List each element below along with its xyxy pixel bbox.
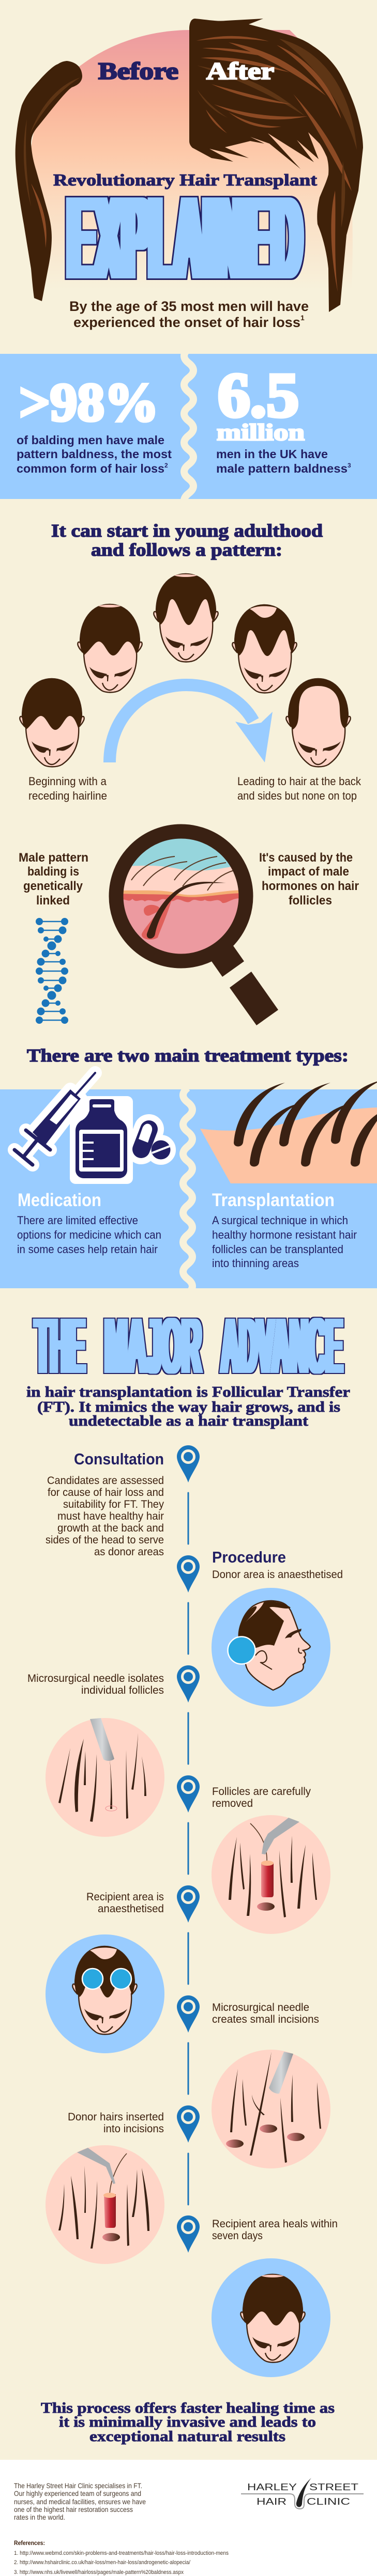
- logo: Harley Street Hair Clinic: HARLEY: [247, 2482, 297, 2492]
- step: donor hairs inserted: Donor hairs inserted: [68, 2111, 164, 2123]
- references: 2. http://www.hshairclinic.co.uk/hair-loss/men-hair-loss/androgenetic-alopecia/: [14, 2559, 191, 2566]
- icons: syringe, bottle and pills: [14, 1073, 171, 1178]
- label: before: Before: [98, 58, 178, 85]
- head stage: mild recession: [78, 604, 142, 692]
- illustration: final head with restored hair: [212, 2258, 330, 2377]
- closing statement: exceptional natural results: [89, 2428, 285, 2445]
- heading: the major advance: THE: [35, 1302, 85, 1390]
- stat: 6.5 million: million: [217, 419, 305, 445]
- step: consultation: suitability for FT. They: [63, 1498, 164, 1510]
- icon: DNA helix: [36, 918, 68, 1024]
- clinic description: Our highly experienced team of surgeons and: [14, 2489, 141, 2497]
- arrow: progression of baldness: [110, 685, 273, 762]
- text: male hormones: impact of male: [268, 865, 349, 879]
- references: References:: [14, 2539, 45, 2547]
- logo: Harley Street Hair Clinic: STREET: [309, 2482, 358, 2492]
- step: recipient area: Recipient area is: [86, 1891, 164, 1903]
- references: [14, 2539, 229, 2575]
- stat: 98 percent: of balding men have male: [17, 433, 164, 447]
- footer panel: [0, 2460, 377, 2576]
- step: consultation: Consultation: [74, 1450, 164, 1468]
- heading: pattern: [51, 521, 323, 560]
- illustration: needle creating incisions: [212, 2050, 330, 2168]
- text: genetically linked: Male pattern: [19, 851, 88, 865]
- label: after: After: [206, 58, 274, 85]
- caption: back and sides: [237, 775, 361, 802]
- head stage: beginning: [20, 679, 84, 767]
- text: male hormones: It's caused by the: [259, 851, 353, 865]
- head stage: deep recession: [154, 574, 218, 662]
- hair: before side: [16, 61, 82, 301]
- closing statement: This process offers faster healing time as: [41, 2400, 335, 2416]
- step: small incisions: Microsurgical needle: [212, 2002, 309, 2013]
- stat: 98 percent: >98%: [19, 372, 159, 432]
- heading: treatment types: There are two main treatment types:: [27, 1045, 349, 1066]
- caption: receding hairline: Beginning with a: [28, 775, 107, 788]
- clinic description: rates in the world.: [14, 2513, 65, 2521]
- clinic description: [14, 2481, 146, 2521]
- text: male hormones: [259, 851, 359, 908]
- logo: Harley Street Hair Clinic: CLINIC: [307, 2496, 350, 2507]
- text: genetically linked: balding is: [27, 865, 79, 879]
- stat: 98 percent: [17, 372, 172, 475]
- step: consultation: sides of the head to serve: [46, 1534, 164, 1546]
- step: follicles removed: Follicles are carefully: [212, 1786, 311, 1798]
- stat: 6.5 million: [216, 361, 351, 475]
- text: medication: Medication: [18, 1190, 101, 1210]
- step: follicles removed: removed: [212, 1798, 253, 1809]
- timeline: pins and connectors: [177, 1445, 200, 2253]
- step: procedure, donor area: Procedure: [212, 1548, 286, 1566]
- illustration: profile head with donor area: [212, 1588, 330, 1707]
- caption: receding hairline: receding hairline: [28, 789, 107, 802]
- intro text: 1: [300, 314, 305, 322]
- step: small incisions: creates small incisions: [212, 2013, 319, 2025]
- text: follicular transfer intro: (FT). It mimics the way hair grows, and is: [37, 1399, 340, 1415]
- step: recipient area heals: seven days: [212, 2230, 263, 2242]
- step: follicles removed: [212, 1786, 311, 1809]
- step: consultation: Candidates are assessed: [47, 1475, 164, 1487]
- step: needle isolates: individual follicles: [81, 1684, 164, 1696]
- step: consultation: must have healthy hair: [57, 1510, 164, 1522]
- closing statement: [41, 2400, 335, 2445]
- icon: magnifying glass over skin cross-section: [116, 832, 278, 1025]
- heading: pattern: and follows a pattern:: [91, 540, 282, 560]
- text: transplantation: healthy hormone resistant hair: [212, 1228, 357, 1241]
- illustration: needle isolating follicle: [46, 1718, 164, 1837]
- text: transplantation: into thinning areas: [212, 1257, 299, 1270]
- illustration: follicle removed with tweezers: [212, 1815, 330, 1934]
- hair: after side: [189, 19, 363, 312]
- references: 1. http://www.webmd.com/skin-problems-and-treatments/hair-loss/hair-loss-introduction-mens: [14, 2550, 229, 2556]
- heading: the major advance: [35, 1302, 342, 1390]
- text: medication: There are limited effective: [17, 1214, 138, 1227]
- title: Revolutionary Hair Transplant: [53, 170, 317, 189]
- text: genetically linked: [19, 851, 88, 908]
- head stage: crown thinning: [232, 605, 297, 693]
- caption: receding hairline: [28, 775, 107, 802]
- stat: 98 percent: 2: [164, 462, 168, 469]
- stat: 6.5 million: men in the UK have: [216, 447, 328, 461]
- caption: back and sides: Leading to hair at the back: [237, 775, 361, 788]
- text: genetically linked: genetically: [23, 879, 83, 893]
- references: 3. http://www.nhs.uk/livewell/hairloss/pages/male-pattern%20baldness.aspx: [14, 2569, 184, 2575]
- stat: 6.5 million: 3: [348, 462, 351, 469]
- text: transplantation: Transplantation: [212, 1190, 335, 1210]
- step: procedure, donor area: [212, 1548, 343, 1581]
- stat: 98 percent: common form of hair loss: [17, 462, 164, 475]
- logo: Harley Street Hair Clinic: HAIR: [257, 2496, 286, 2507]
- text: medication: options for medicine which can: [17, 1228, 161, 1241]
- header: split head illustration: [16, 19, 363, 312]
- logo: Harley Street Hair Clinic: [241, 2478, 364, 2509]
- heading: pattern: It can start in young adulthood: [51, 521, 323, 541]
- closing statement: it is minimally invasive and leads to: [59, 2414, 316, 2430]
- stat: 6.5 million: male pattern baldness: [216, 462, 348, 475]
- step: consultation: [46, 1450, 164, 1558]
- step: small incisions: [212, 2002, 319, 2025]
- clinic description: one of the highest hair restoration success: [14, 2505, 133, 2513]
- step: consultation: growth at the back and: [57, 1522, 164, 1534]
- text: transplantation: follicles can be transplanted: [212, 1243, 343, 1256]
- intro text: experienced the onset of hair loss: [73, 315, 300, 330]
- clinic description: The Harley Street Hair Clinic specialises in FT.: [14, 2481, 142, 2490]
- step: recipient area heals: [212, 2218, 338, 2242]
- caption: back and sides: and sides but none on top: [237, 789, 357, 802]
- text: transplantation: [212, 1190, 357, 1270]
- panel: treatment types: [0, 1073, 377, 1293]
- step: recipient area heals: Recipient area heals within: [212, 2218, 338, 2230]
- text: male hormones: hormones on hair: [262, 879, 359, 893]
- step: recipient area: [86, 1891, 164, 1915]
- text: medication: in some cases help retain hair: [17, 1243, 158, 1256]
- stat: 98 percent: pattern baldness, the most: [17, 447, 172, 461]
- clinic description: nurses, and medical facilities, ensures we have: [14, 2497, 146, 2506]
- step: procedure, donor area: Donor area is anaesthetised: [212, 1569, 343, 1581]
- step: recipient area: anaesthetised: [98, 1903, 164, 1915]
- text: follicular transfer intro: undetectable as a hair transplant: [69, 1413, 308, 1429]
- illustration: donor hair inserted with tweezers: [46, 2145, 164, 2264]
- intro text: [69, 299, 309, 330]
- step: consultation: as donor areas: [94, 1546, 164, 1558]
- illustration: hair growing from scalp: [200, 1080, 377, 1183]
- stat: 6.5 million: 6.5: [218, 361, 299, 430]
- panel: statistics: [0, 349, 377, 508]
- text: follicular transfer intro: in hair transplantation is Follicular Transfer: [26, 1384, 350, 1400]
- step: needle isolates: Microsurgical needle isolates: [27, 1673, 164, 1684]
- text: genetically linked: linked: [36, 894, 70, 908]
- text: follicular transfer intro: [26, 1384, 350, 1429]
- text: medication: [17, 1190, 161, 1256]
- text: transplantation: A surgical technique in which: [212, 1214, 348, 1227]
- intro text: By the age of 35 most men will have: [69, 299, 309, 314]
- text: male hormones: follicles: [289, 894, 332, 908]
- head stage: bald on top: [286, 679, 351, 767]
- step: consultation: for cause of hair loss and: [48, 1487, 164, 1498]
- illustration: head with recipient area highlighted: [46, 1934, 164, 2053]
- step: needle isolates: [27, 1673, 164, 1696]
- bald scalp with gradient: [31, 30, 353, 289]
- step: donor hairs inserted: [68, 2111, 164, 2135]
- step: donor hairs inserted: into incisions: [103, 2123, 164, 2135]
